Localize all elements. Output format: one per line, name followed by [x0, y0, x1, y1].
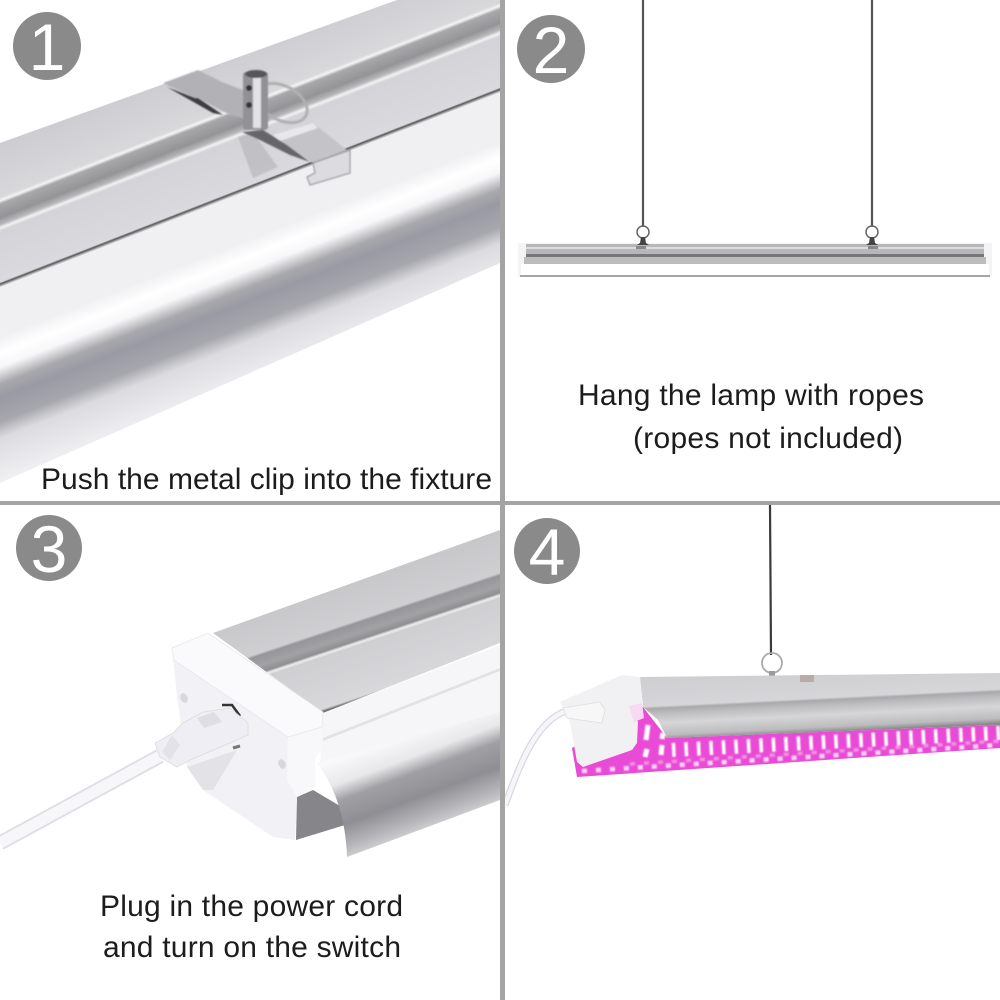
step 2 badge: 2	[533, 13, 569, 87]
step 1 badge: 1	[29, 10, 65, 84]
step 4 badge: 4	[529, 515, 565, 589]
vertical divider	[500, 0, 505, 1000]
step 3 badge: 3	[31, 512, 67, 586]
step 3 badge	[16, 512, 82, 586]
lamp body	[640, 673, 1000, 738]
power cord and plug	[0, 708, 248, 843]
panel 3: power cord	[0, 530, 500, 857]
end cap	[560, 675, 642, 767]
caption 3: and turn on the switch	[103, 931, 401, 964]
LED rows	[582, 725, 1000, 771]
metal clip	[163, 70, 350, 185]
lamp body close-up	[0, 0, 500, 483]
pink LED glow	[572, 707, 1000, 777]
ring	[762, 653, 782, 673]
pin and ring	[250, 75, 314, 131]
panel 1: metal clip photo	[0, 0, 500, 483]
step 4 badge	[514, 515, 580, 589]
caption 2: (ropes not included)	[633, 422, 903, 455]
panel 4: lit lamp	[505, 505, 1000, 805]
end cap	[172, 633, 323, 840]
caption 1: Push the metal clip into the fixture	[41, 463, 492, 496]
caption 2: Hang the lamp with ropes	[578, 379, 924, 412]
lamp side view	[518, 243, 992, 277]
silver reflector	[317, 712, 500, 857]
step 2 badge	[517, 13, 585, 87]
hanging rings	[637, 226, 878, 238]
clips	[636, 237, 878, 249]
lamp body top	[213, 530, 500, 713]
step 1 badge	[13, 10, 81, 84]
white rail	[320, 645, 500, 765]
caption 3: Plug in the power cord	[100, 890, 403, 923]
caption 3	[100, 890, 403, 964]
panel 2: hanging lamp	[518, 0, 992, 277]
hanging rope	[770, 505, 771, 655]
ropes	[643, 0, 872, 227]
horizontal divider	[0, 501, 1000, 505]
power cord	[505, 702, 605, 805]
dark interior	[296, 790, 345, 840]
caption 2	[578, 379, 924, 455]
